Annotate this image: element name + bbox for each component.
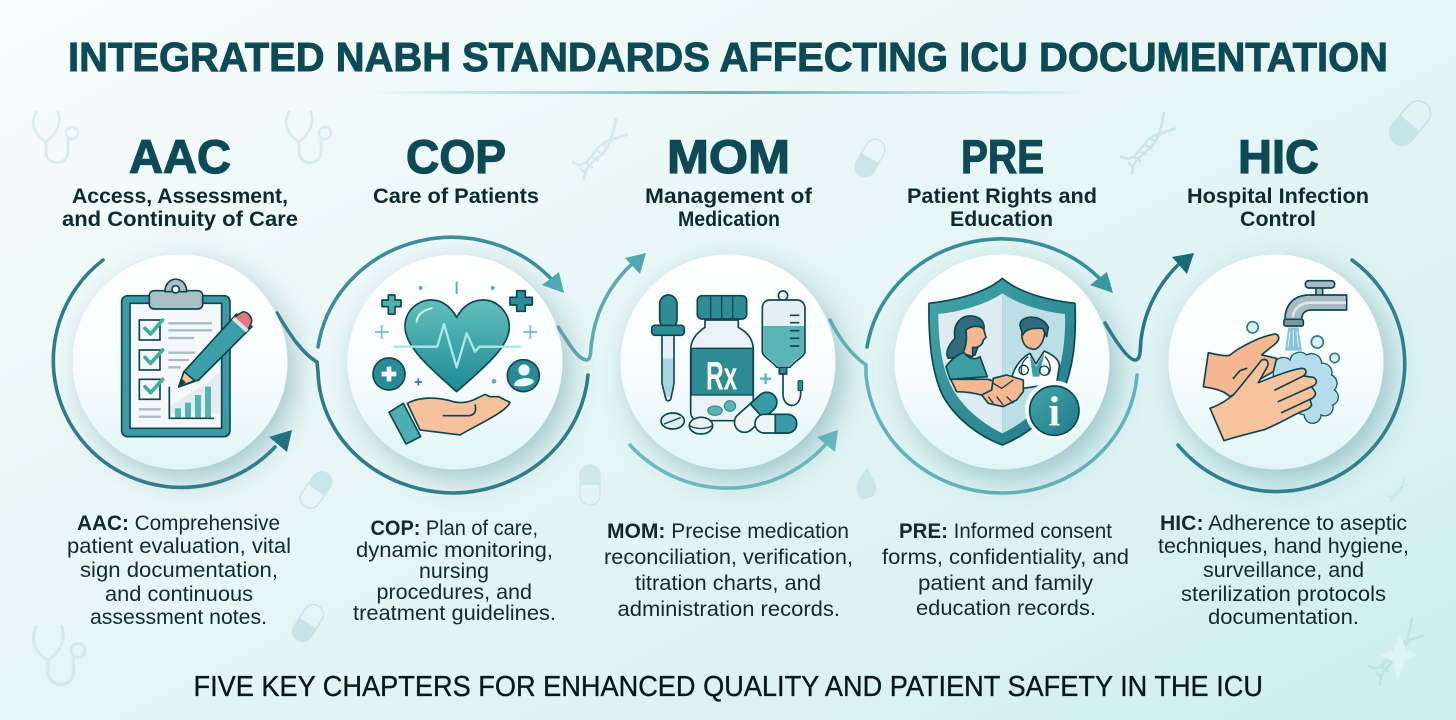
panel: MOM	[604, 130, 866, 621]
arrow: COP ring	[317, 237, 646, 493]
body text: COP: procedures, and	[376, 581, 532, 604]
body text: PRE	[882, 520, 1129, 620]
body text: PRE: PRE: Informed consent	[899, 520, 1112, 543]
subheading: HIC: Control	[1240, 208, 1316, 231]
icon: shield with handshake and info badge	[929, 278, 1084, 445]
arrow: PRE ring	[866, 239, 1194, 493]
heading: MOM: MOM	[667, 130, 790, 183]
body text: AAC: AAC: Comprehensive	[77, 512, 280, 535]
body text: MOM: reconciliation, verification,	[604, 546, 853, 569]
arrow: MOM ring	[630, 320, 866, 488]
body text: PRE: education records.	[916, 597, 1096, 620]
icon disc: AAC	[72, 254, 288, 470]
body text: MOM	[604, 520, 853, 621]
subheading: AAC	[62, 185, 298, 231]
subheading: COP: Care of Patients	[373, 185, 539, 208]
title: INTEGRATED NABH STANDARDS AFFECTING ICU DOCUMENTATION	[68, 34, 1388, 80]
panel: COP	[317, 130, 646, 625]
icon disc: HIC	[1168, 254, 1384, 470]
body text: HIC: surveillance, and	[1203, 559, 1364, 582]
icon disc: PRE	[894, 254, 1110, 470]
panel: HIC	[1158, 130, 1409, 629]
icon: hand washing under faucet	[1203, 281, 1347, 441]
body text: AAC: sign documentation,	[80, 559, 278, 582]
subheading: MOM: Medication	[678, 208, 780, 231]
subheading: PRE: Education	[950, 208, 1053, 231]
subheading: PRE	[907, 185, 1097, 231]
icon: medication bottle, dropper and IV bag: Rx	[706, 354, 737, 398]
body text: AAC: patient evaluation, vital	[67, 535, 291, 558]
body text: HIC: sterilization protocols	[1181, 583, 1386, 606]
subheading: MOM	[645, 185, 813, 231]
body text: MOM: administration records.	[618, 598, 840, 621]
heading: HIC: HIC	[1238, 130, 1319, 183]
icon disc: COP	[348, 254, 562, 470]
icon: shield with handshake and info badge: i	[1048, 388, 1060, 435]
subheading: HIC: Hospital Infection	[1187, 185, 1369, 208]
panel: PRE	[866, 130, 1194, 620]
footer tagline: FIVE KEY CHAPTERS FOR ENHANCED QUALITY AND PATIENT SAFETY IN THE ICU	[194, 671, 1263, 703]
icon disc: MOM	[620, 254, 836, 470]
body text: AAC: and continuous	[105, 583, 253, 606]
subheading: PRE: Patient Rights and	[907, 185, 1097, 208]
body text: HIC: HIC: Adherence to aseptic	[1160, 512, 1407, 535]
arrow: HIC ring	[1178, 260, 1405, 492]
body text: MOM: titration charts, and	[635, 572, 821, 595]
panel: AAC	[53, 130, 317, 629]
subheading: HIC	[1187, 185, 1369, 231]
icon: medication bottle, dropper and IV bag	[652, 291, 805, 436]
decorative background medical icons	[33, 96, 1436, 685]
body text: PRE: forms, confidentiality, and	[882, 546, 1129, 569]
body text: MOM: MOM: Precise medication	[607, 520, 849, 543]
subheading: AAC: and Continuity of Care	[62, 208, 298, 231]
body text: AAC: assessment notes.	[90, 606, 267, 629]
subheading: MOM: Management of	[645, 185, 813, 208]
body text: PRE: patient and family	[918, 572, 1094, 595]
heading: AAC: AAC	[129, 130, 231, 183]
body text: COP: dynamic monitoring,	[356, 539, 553, 562]
body text: HIC	[1158, 512, 1409, 629]
body text: COP: COP: Plan of care,	[370, 517, 538, 540]
icon: heart in hand	[373, 282, 539, 444]
body text: COP	[353, 517, 556, 625]
body text: COP: nursing	[419, 560, 489, 583]
heading: PRE: PRE	[961, 130, 1044, 183]
body text: HIC: documentation.	[1208, 606, 1359, 629]
arrow: AAC ring	[53, 260, 317, 487]
body text: AAC	[67, 512, 291, 629]
body text: HIC: techniques, hand hygiene,	[1158, 535, 1409, 558]
body text: COP: treatment guidelines.	[353, 602, 556, 625]
icon: clipboard with pencil	[122, 279, 252, 437]
subheading: AAC: Access, Assessment,	[72, 185, 288, 208]
heading: COP: COP	[406, 130, 506, 183]
